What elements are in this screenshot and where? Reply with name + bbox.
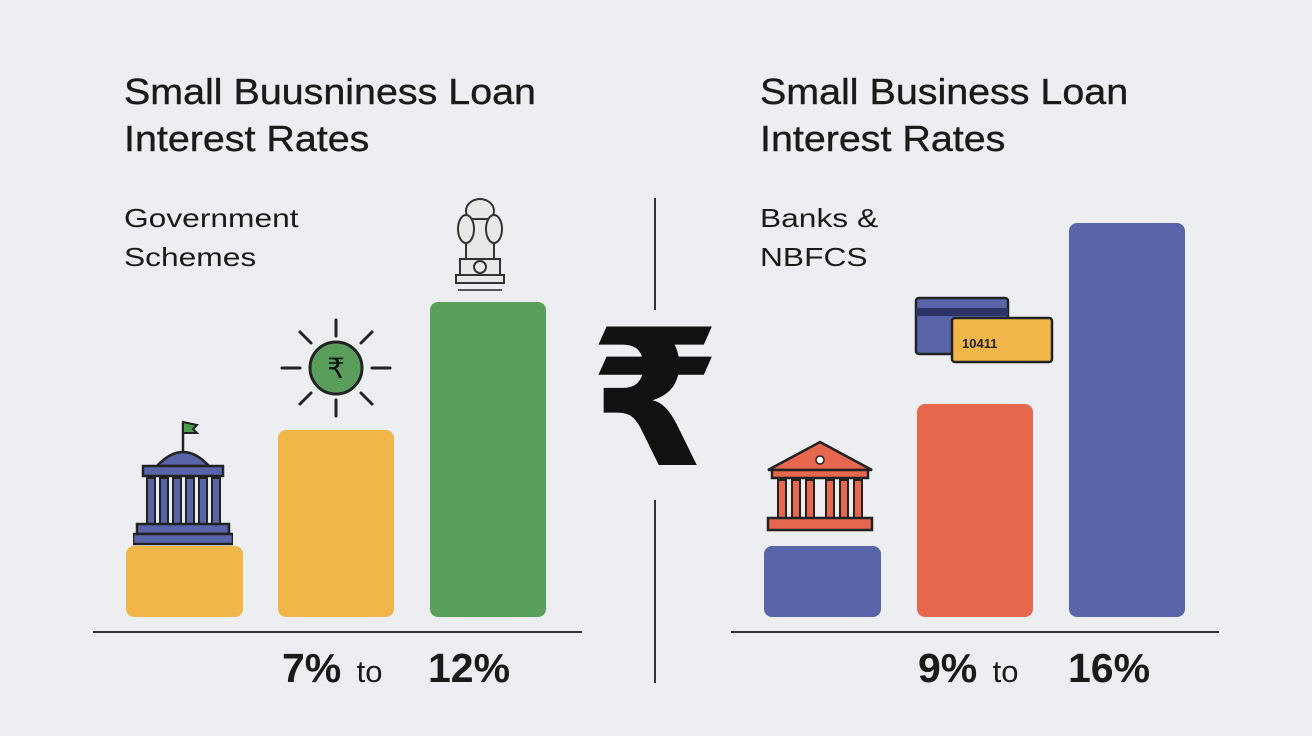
icon: national emblem	[455, 198, 505, 291]
bar chart: government schemes	[93, 302, 582, 633]
subtitle: government schemes	[124, 203, 299, 272]
icon: bank red	[766, 440, 874, 532]
subtitle: government schemes: Schemes	[124, 242, 256, 272]
title: right: Small Business Loan	[760, 71, 1128, 112]
icon: cards	[914, 296, 1054, 364]
subtitle: government schemes: Government	[124, 203, 299, 233]
icon: cards: 10411	[962, 336, 997, 351]
label: left range: 7% to	[282, 645, 383, 691]
bar chart: banks	[731, 223, 1219, 633]
icon: sun rupee	[280, 318, 392, 418]
bar: blue small	[764, 546, 881, 617]
bar: blue tall	[1069, 223, 1185, 617]
subtitle: banks: NBFCS	[760, 242, 868, 272]
divider line top	[654, 198, 656, 310]
title: right	[760, 71, 1128, 159]
label: left max: 12%	[428, 645, 510, 691]
bar: green	[430, 302, 546, 617]
icon: government building	[133, 420, 233, 546]
subtitle: banks: Banks &	[760, 203, 878, 233]
bar: yellow medium	[278, 430, 394, 617]
title: left: Interest Rates	[124, 118, 369, 159]
icon: rupee symbol: ₹	[589, 289, 721, 510]
bar: red	[917, 404, 1033, 617]
bar: yellow small	[126, 546, 243, 617]
label: right max: 16%	[1068, 645, 1150, 691]
label: right range: 9% to	[918, 645, 1019, 691]
icon: sun rupee: ₹	[327, 352, 345, 385]
title: right: Interest Rates	[760, 118, 1005, 159]
divider line bottom	[654, 500, 656, 683]
title: left: Small Buusniness Loan	[124, 71, 536, 112]
subtitle: banks	[760, 203, 878, 272]
title: left	[124, 71, 536, 159]
